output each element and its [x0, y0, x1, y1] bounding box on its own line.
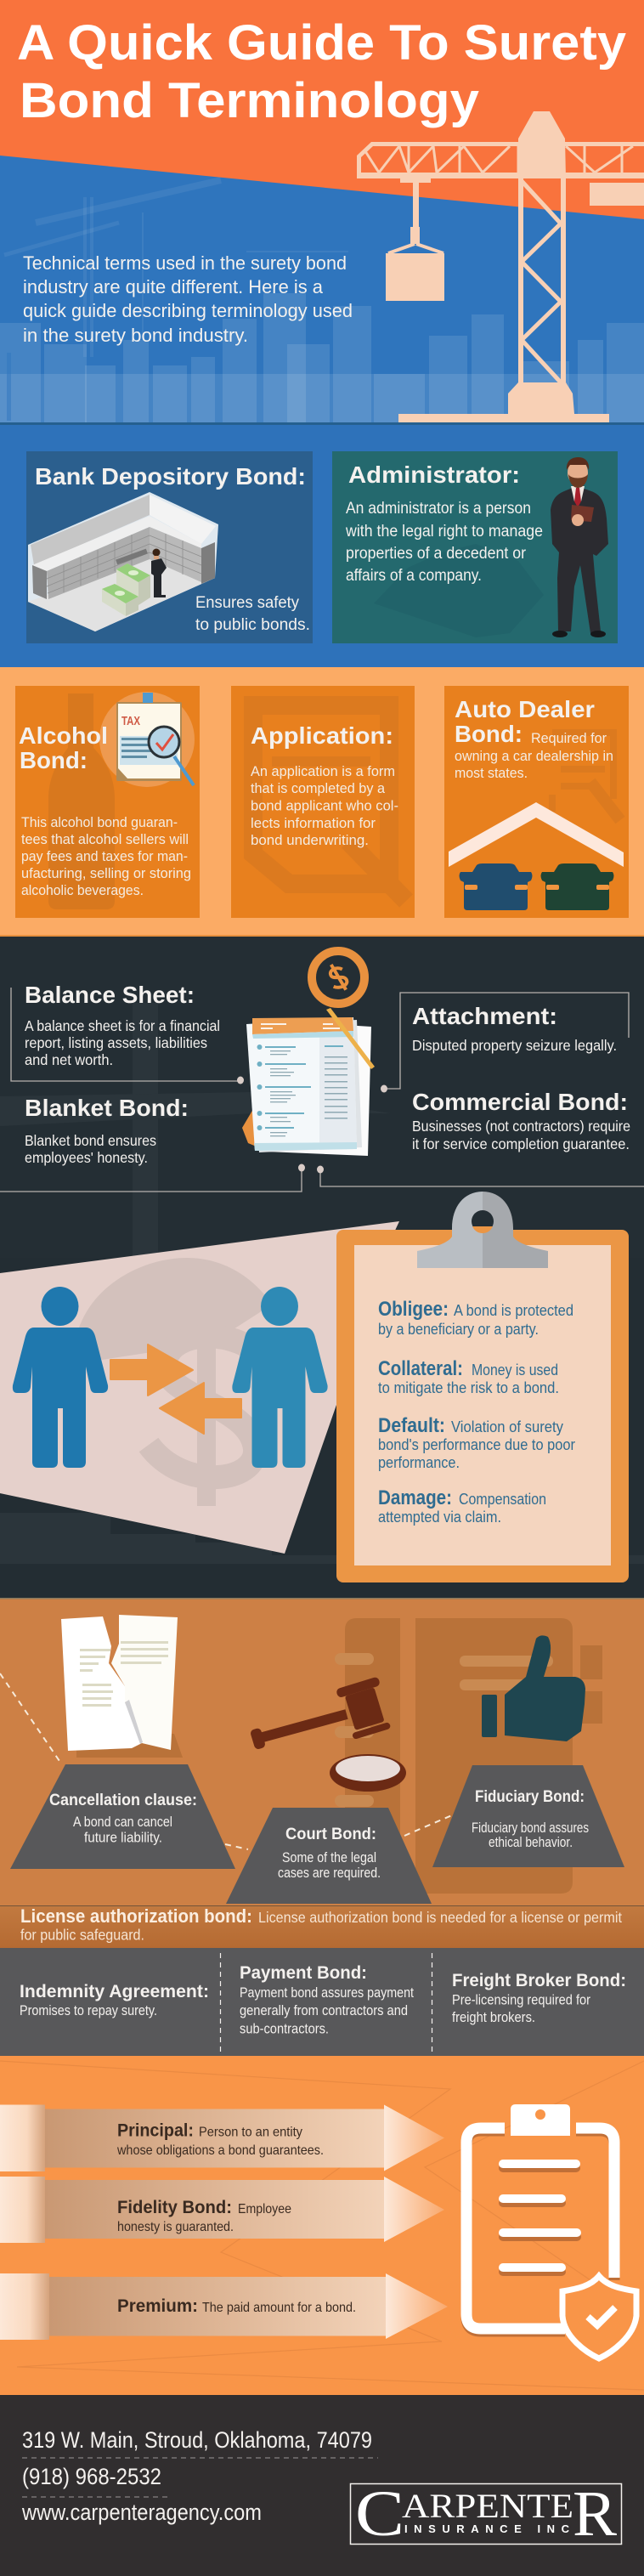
- text block: blanket bond: Blanket Bond:: [25, 1095, 189, 1121]
- arrow: principal: Person to an entity: [199, 2125, 302, 2140]
- section: footer: [0, 2395, 644, 2576]
- text block: affairs of a company.: [346, 567, 482, 585]
- panel: license authorization bond: License authorization bond is needed for a license or permit: [258, 1909, 622, 1926]
- arrow: premium: The paid amount for a bond.: [202, 2301, 356, 2315]
- heading: Alcohol: [19, 722, 108, 749]
- text: default: [378, 1414, 575, 1471]
- heading: [19, 722, 108, 773]
- logo: R: [573, 2478, 617, 2550]
- icon: ghost document and magnifier: [253, 705, 406, 901]
- section: orange cards: [0, 667, 644, 935]
- text block: attachment: Disputed property seizure legally.: [412, 1037, 617, 1054]
- icon: clipboard clip: [417, 1192, 548, 1268]
- text: default: performance.: [378, 1454, 460, 1471]
- arrow: principal: Principal:: [117, 2121, 194, 2140]
- panel: auto dealer bond: [444, 686, 629, 918]
- panel: application: [231, 686, 415, 918]
- icon: vault room with cash and man: [28, 492, 218, 631]
- title: [17, 15, 626, 128]
- icon: tax document: [99, 692, 195, 787]
- text block: owning a car dealership in: [455, 748, 613, 764]
- logo: ARPENTE: [402, 2487, 573, 2525]
- icon: ghost paper and pencil: [552, 733, 620, 820]
- text block: [195, 594, 310, 634]
- icon: green car: [540, 863, 613, 910]
- panel: fiduciary bond: Fiduciary bond assures: [472, 1820, 589, 1836]
- text block: [455, 730, 613, 781]
- arrow: right: [110, 1345, 193, 1396]
- icon: right person: [232, 1287, 328, 1468]
- panel: cancellation clause: future liability.: [84, 1829, 162, 1846]
- section: brown legal: [0, 1598, 644, 2056]
- icon: clipboard with shield: [466, 2104, 636, 2358]
- section: blue cards: [0, 425, 644, 667]
- text block: attachment: [412, 1003, 617, 1054]
- arrow: principal: [0, 2104, 444, 2171]
- heading: Administrator:: [348, 461, 520, 488]
- panel: cancellation clause: [10, 1764, 235, 1869]
- section: dark: [0, 935, 644, 1598]
- panel: alcohol bond: [15, 686, 200, 918]
- payment bond: Payment bond assures payment: [240, 1985, 414, 2001]
- intro text: in the surety bond industry.: [23, 325, 248, 346]
- panel: cancellation clause: Cancellation clause:: [49, 1791, 197, 1809]
- icon: left person: [13, 1287, 108, 1468]
- text: damage: [378, 1486, 546, 1526]
- text block: commercial bond: Businesses (not contractors) require: [412, 1118, 630, 1135]
- text block: An application is a form: [251, 763, 395, 779]
- text block: This alcohol bond guaran-: [21, 814, 178, 830]
- logo: [350, 2478, 622, 2550]
- text: obligee: A bond is protected: [454, 1302, 573, 1319]
- payment bond: [240, 1963, 414, 2036]
- icon: blue car: [459, 863, 532, 910]
- panel: bank depository bond: [26, 451, 313, 643]
- text block: balance sheet: A balance sheet is for a financial: [25, 1017, 220, 1034]
- text block: ufacturing, selling or storing: [21, 865, 191, 881]
- text block: [251, 763, 398, 848]
- text: default: Default:: [378, 1414, 445, 1437]
- panel: license authorization bond: License authorization bond:: [20, 1905, 252, 1927]
- intro text: [23, 252, 353, 346]
- intro text: industry are quite different. Here is a: [23, 276, 324, 297]
- icon: ghost handshake: [374, 544, 544, 637]
- faint zigzag lines: [0, 2061, 644, 2390]
- logo: C: [355, 2478, 404, 2550]
- hero section: [0, 0, 644, 425]
- text: obligee: [378, 1298, 573, 1338]
- connector lines: [0, 988, 644, 1192]
- panel: gray row: [0, 1948, 644, 2056]
- text: phone: (918) 968-2532: [22, 2464, 161, 2489]
- text block: lects information for: [251, 815, 376, 831]
- text block: [345, 500, 543, 585]
- payment bond: generally from contractors and: [240, 2003, 408, 2018]
- panel: court bond: [226, 1808, 432, 1904]
- dashed dividers: [221, 1953, 432, 2054]
- freight broker bond: Freight Broker Bond:: [452, 1971, 626, 1990]
- heading: Bond:: [20, 747, 88, 773]
- title: Bond Terminology: [20, 73, 479, 128]
- ghost city and crane: [0, 1003, 644, 1564]
- icon: tax document: TAX: [121, 714, 140, 728]
- intro text: Technical terms used in the surety bond: [23, 252, 347, 274]
- connector dots: [237, 1076, 387, 1173]
- text: damage: attempted via claim.: [378, 1509, 501, 1526]
- indemnity agreement: Indemnity Agreement:: [20, 1982, 209, 2001]
- icon: dollar coin: [312, 951, 364, 1004]
- payment bond: sub-contractors.: [240, 2021, 329, 2036]
- icon: house roof: [449, 802, 624, 867]
- payment bond: Payment Bond:: [240, 1963, 367, 1983]
- indemnity agreement: Promises to repay surety.: [20, 2003, 157, 2018]
- section: orange arrows: [0, 2056, 644, 2395]
- icon: ghost binder: [345, 1618, 602, 1894]
- text block: bond applicant who col-: [251, 797, 398, 814]
- heading: Auto Dealer: [455, 696, 595, 722]
- text block: with the legal right to manage: [345, 523, 543, 541]
- panel: clipboard: [336, 1192, 629, 1582]
- text block: Required for: [531, 730, 607, 746]
- panel: fiduciary bond: ethical behavior.: [489, 1835, 573, 1850]
- title: A Quick Guide To Surety: [17, 15, 626, 71]
- panel: administrator: [332, 451, 618, 643]
- text: obligee: by a beneficiary or a party.: [378, 1321, 539, 1338]
- text: default: Violation of surety: [451, 1418, 563, 1435]
- city skyline background: [0, 293, 644, 422]
- text block: blanket bond: employees' honesty.: [25, 1149, 148, 1166]
- text block: commercial bond: it for service completion guarantee.: [412, 1135, 630, 1152]
- text block: balance sheet: report, listing assets, liabilities: [25, 1034, 207, 1051]
- orange diagonal header: [0, 0, 644, 219]
- panel: fiduciary bond: Fiduciary Bond:: [475, 1787, 585, 1806]
- intro text: quick guide describing terminology used: [23, 300, 353, 321]
- text block: balance sheet: [25, 982, 220, 1068]
- indemnity agreement: [20, 1982, 209, 2018]
- text block: [21, 814, 191, 898]
- text block: balance sheet: and net worth.: [25, 1051, 113, 1068]
- heading: Application:: [251, 722, 393, 749]
- logo: INSURANCE INC: [404, 2522, 570, 2535]
- arrow: fidelity bond: [0, 2177, 444, 2243]
- heading: [455, 696, 595, 747]
- text block: properties of a decedent or: [346, 545, 527, 563]
- text block: alcoholic beverages.: [21, 882, 144, 898]
- panel: pink spotlight: [0, 1221, 399, 1554]
- icon: businessman: [551, 457, 608, 637]
- icon: torn paper: [61, 1615, 183, 1758]
- arrow: fidelity bond: Fidelity Bond:: [117, 2198, 232, 2217]
- text block: An administrator is a person: [346, 500, 531, 518]
- heading: Bank Depository Bond:: [35, 463, 306, 490]
- dashed connectors: [0, 1673, 454, 1849]
- text: damage: Compensation: [459, 1491, 546, 1508]
- icon: crane: [357, 111, 644, 422]
- text block: attachment: Attachment:: [412, 1003, 557, 1029]
- text: default: bond's performance due to poor: [378, 1436, 575, 1453]
- text: damage: Damage:: [378, 1486, 452, 1509]
- arrow: principal: whose obligations a bond guarantees.: [116, 2143, 324, 2158]
- text block: that is completed by a: [251, 780, 386, 796]
- text: collateral: Collateral:: [378, 1357, 463, 1380]
- text block: Ensures safety: [195, 594, 299, 612]
- text: collateral: Money is used: [472, 1362, 558, 1379]
- arrow: premium: Premium:: [117, 2296, 198, 2316]
- panel: cancellation clause: A bond can cancel: [73, 1814, 172, 1830]
- arrow: fidelity bond: Employee: [238, 2202, 291, 2216]
- text block: bond underwriting.: [251, 832, 369, 848]
- text block: tees that alcohol sellers will: [21, 831, 189, 847]
- icon: sound block: [330, 1754, 406, 1792]
- panel: court bond: cases are required.: [278, 1865, 381, 1881]
- text block: blanket bond: Blanket bond ensures: [25, 1132, 156, 1149]
- freight broker bond: Pre-licensing required for: [452, 1992, 590, 2007]
- icon: thumbs up: [482, 1635, 585, 1741]
- freight broker bond: freight brokers.: [452, 2010, 535, 2025]
- text block: to public bonds.: [195, 616, 310, 634]
- text block: most states.: [455, 765, 528, 781]
- icon: ghost dollar: [78, 1258, 272, 1506]
- text: collateral: to mitigate the risk to a bond.: [378, 1379, 559, 1396]
- freight broker bond: [452, 1971, 626, 2025]
- panel: court bond: Some of the legal: [282, 1849, 376, 1865]
- heading: Bond:: [455, 721, 523, 747]
- panel: license authorization bond: for public safeguard.: [20, 1926, 144, 1943]
- icon: gavel: [250, 1676, 393, 1750]
- ghost crane: [4, 180, 348, 357]
- text: collateral: [378, 1357, 559, 1396]
- text: obligee: Obligee:: [378, 1298, 449, 1321]
- text block: blanket bond: [25, 1095, 189, 1166]
- text block: commercial bond: [412, 1089, 630, 1152]
- text: website: www.carpenteragency.com: [21, 2500, 262, 2525]
- panel: court bond: Court Bond:: [285, 1825, 376, 1843]
- text: address: 319 W. Main, Stroud, Oklahoma, 74079: [22, 2427, 372, 2453]
- arrow: left: [160, 1383, 241, 1434]
- panel: license authorization bond: [0, 1905, 644, 1948]
- icon: balance sheet documents: [242, 1008, 375, 1156]
- icon: ghost bottle: [48, 694, 115, 909]
- text block: commercial bond: Commercial Bond:: [412, 1089, 628, 1115]
- text block: balance sheet: Balance Sheet:: [25, 982, 195, 1008]
- panel: fiduciary bond: [432, 1765, 624, 1867]
- arrow: fidelity bond: honesty is guaranted.: [117, 2220, 234, 2234]
- text block: pay fees and taxes for man-: [21, 848, 188, 864]
- arrow: premium: [0, 2273, 448, 2340]
